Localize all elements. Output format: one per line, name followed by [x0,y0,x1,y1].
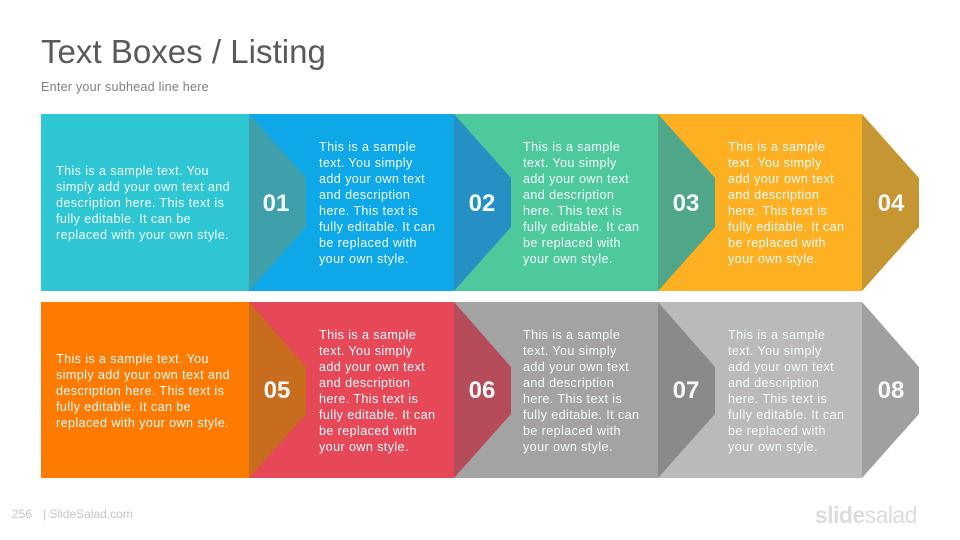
panel: item 01: description here. This text is [56,196,224,210]
panel: item 04: add your own text [728,172,834,186]
panel: item 03: your own style. [523,252,613,266]
panel: item 03 [454,114,658,291]
panel: item 06: add your own text [319,360,425,374]
panel: item 08: This is a sample [728,328,825,342]
panel: item 08: your own style. [728,440,818,454]
panel: item 06: This is a sample [319,328,416,342]
panel: item 07: be replaced with [523,424,621,438]
panel: item 01: simply add your own text and [56,180,230,194]
panel: item 06: text. You simply [319,344,413,358]
panel: item 03: here. This text is [523,204,622,218]
panel: item 06: be replaced with [319,424,417,438]
panel: item 04: here. This text is [728,204,827,218]
panel: item 02: add your own text [319,172,425,186]
arrow: 02: 02 [469,190,495,217]
panel: item 02: be replaced with [319,236,417,250]
panel: item 03: text. You simply [523,156,617,170]
panel: item 08: and description [728,376,819,390]
panel: item 03: This is a sample [523,140,620,154]
arrow: 04: 04 [878,190,905,217]
panel: item 03: add your own text [523,172,629,186]
panel: item 04: text. You simply [728,156,822,170]
arrow: 05 [249,302,306,478]
footer: page number and site: 256 [12,507,32,521]
panel: item 02 [249,114,454,291]
panel: item 05: replaced with your own style. [56,416,229,430]
arrow: 08: 08 [878,377,904,404]
panel: item 02: This is a sample [319,140,416,154]
panel: item 05 [41,302,249,478]
panel: item 06 [249,302,454,478]
panel: item 05: This is a sample text. You [56,352,209,366]
arrow: 03 [658,114,715,291]
panel: item 03: fully editable. It can [523,220,639,234]
panel: item 04: This is a sample [728,140,825,154]
panel: item 05: description here. This text is [56,384,224,398]
panel: item 08: add your own text [728,360,834,374]
title: Text Boxes / Listing [41,33,326,70]
panel: item 07: here. This text is [523,392,622,406]
panel: item 08: be replaced with [728,424,826,438]
panel: item 04: be replaced with [728,236,826,250]
arrow: 01: 01 [263,190,289,217]
footer: page number and site: | SlideSalad.com [43,507,133,521]
panel: item 04: and description [728,188,819,202]
arrow: 06: 06 [469,377,495,404]
panel: item 06: fully editable. It can [319,408,435,422]
panel: item 03: be replaced with [523,236,621,250]
panel: item 08: here. This text is [728,392,827,406]
panel: item 01: This is a sample text. You [56,164,209,178]
panel: item 06: here. This text is [319,392,418,406]
panel: item 02: here. This text is [319,204,418,218]
panel: item 07: fully editable. It can [523,408,639,422]
arrow: 06 [454,302,511,478]
panel: item 08: text. You simply [728,344,822,358]
arrow: 05: 05 [264,377,290,404]
panel: item 07 [454,302,658,478]
panel: item 07: This is a sample [523,328,620,342]
panel: item 03: and description [523,188,614,202]
panel: item 02: and description [319,188,410,202]
panel: item 01: replaced with your own style. [56,228,229,242]
panel: item 07: text. You simply [523,344,617,358]
panel: item 05: simply add your own text and [56,368,230,382]
panel: item 05: fully editable. It can be [56,400,191,414]
logo: slidesalad: slidesalad [815,502,917,528]
panel: item 02: fully editable. It can [319,220,435,234]
panel: item 02: your own style. [319,252,409,266]
panel: item 08: fully editable. It can [728,408,844,422]
arrow: 07: 07 [673,377,699,404]
panel: item 06: your own style. [319,440,409,454]
panel: item 01 [41,114,249,291]
panel: item 04: your own style. [728,252,818,266]
panel: item 07: add your own text [523,360,629,374]
panel: item 07: and description [523,376,614,390]
arrow: 04 [862,114,919,291]
arrow: 08 [862,302,919,478]
panel: item 06: and description [319,376,410,390]
panel: item 04 [658,114,862,291]
subhead: Enter your subhead line here [41,80,209,94]
panel: item 08 [658,302,862,478]
arrow: 01 [249,114,306,291]
arrow: 03: 03 [673,190,699,217]
panel: item 04: fully editable. It can [728,220,844,234]
arrow: 02 [454,114,511,291]
panel: item 02: text. You simply [319,156,413,170]
panel: item 07: your own style. [523,440,613,454]
arrow: 07 [658,302,715,478]
panel: item 01: fully editable. It can be [56,212,191,226]
